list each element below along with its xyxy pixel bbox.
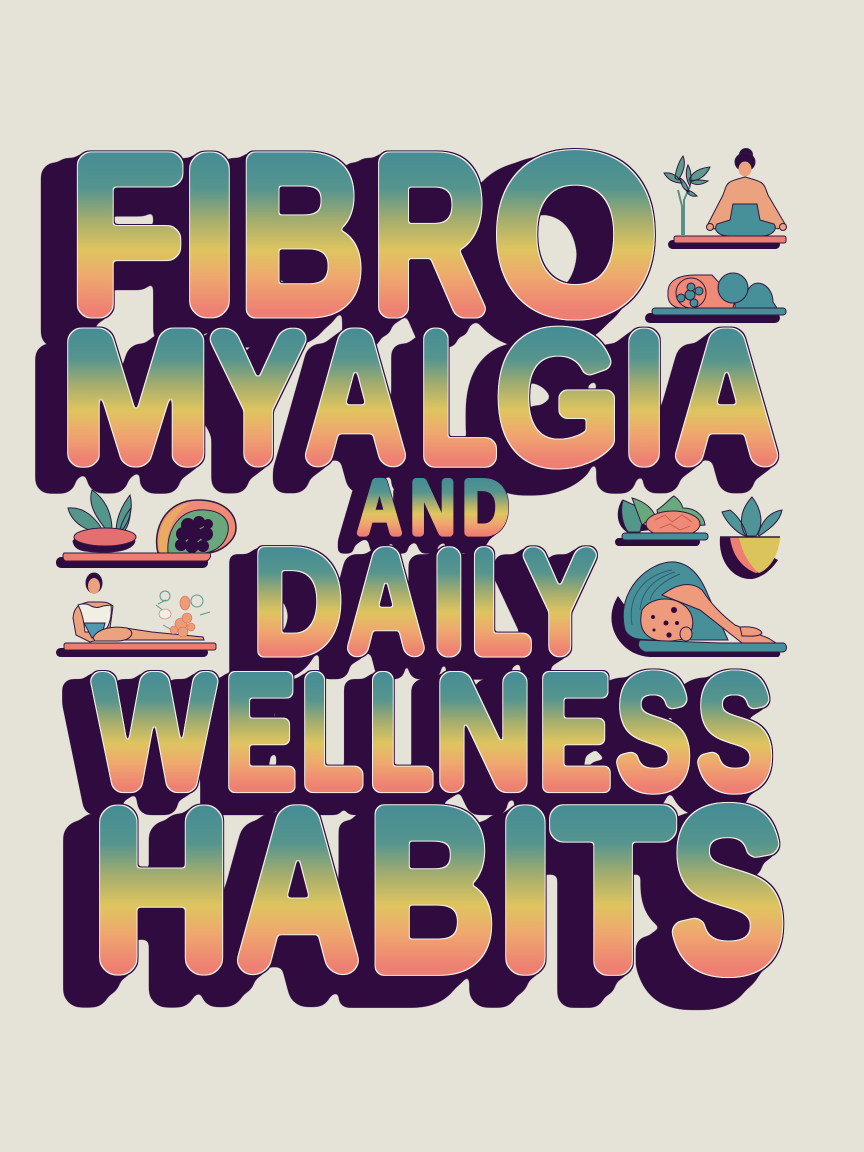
title line: HABITS: B [368, 761, 495, 1019]
title line: DAILY: Y [521, 519, 598, 686]
title line: HABITS [92, 760, 785, 1019]
title line: FIBRO [69, 107, 659, 362]
title line: WELLNESS: L [368, 641, 434, 824]
title line: WELLNESS: W [92, 642, 216, 824]
title line: WELLNESS [92, 640, 773, 824]
title line: DAILY: L [470, 519, 532, 686]
title line: WELLNESS: N [434, 641, 533, 824]
title line: MYALGIA: A [302, 291, 409, 503]
title line: FIBRO: B [238, 108, 365, 362]
title line: FIBRO: R [371, 108, 487, 361]
icon: plant in half-round pot [720, 497, 782, 579]
title line: DAILY: D [252, 519, 343, 686]
title line: MYALGIA [60, 291, 781, 504]
title line: DAILY: I [432, 519, 466, 686]
title line: WELLNESS: L [300, 642, 364, 824]
title line: MYALGIA: Y [207, 291, 309, 504]
title line: MYALGIA: L [418, 291, 498, 504]
title line: HABITS: I [497, 761, 554, 1019]
title line: WELLNESS: E [224, 640, 297, 824]
title line: WELLNESS: S [615, 640, 691, 823]
title line: AND: D [462, 464, 509, 552]
title line: MYALGIA: G [495, 292, 621, 504]
icon: reclining woman and flowers on shelf [56, 573, 216, 657]
title line: HABITS: H [92, 761, 231, 1019]
title: Fibromyalgia and Daily Wellness Habits [60, 107, 785, 1019]
icon: rolled mat and balls on shelf [645, 273, 786, 323]
title line: MYALGIA: M [60, 291, 212, 504]
title line: FIBRO: O [492, 107, 659, 361]
title line: HABITS: S [671, 762, 785, 1019]
title line: DAILY: A [346, 519, 426, 686]
icon: leaves and food tray on shelf [615, 496, 708, 546]
title line: HABITS: T [552, 761, 674, 1019]
title line: AND: N [410, 464, 456, 552]
title line: AND [356, 464, 509, 552]
title line: WELLNESS: S [696, 642, 773, 824]
icon: bamboo plant and meditating woman on shelf [664, 148, 786, 249]
title line: MYALGIA: I [621, 291, 667, 504]
title line: DAILY [252, 519, 598, 686]
title line: HABITS: A [234, 760, 362, 1019]
title line: FIBRO: F [69, 108, 186, 362]
title line: FIBRO: I [180, 107, 239, 362]
title line: MYALGIA: A [672, 292, 781, 504]
icon: person in child's pose under teal wave on shelf [611, 562, 786, 657]
title line: WELLNESS: E [538, 640, 612, 824]
title line: AND: A [356, 464, 403, 552]
icon: potted plant and berry dish on shelf [56, 490, 236, 568]
